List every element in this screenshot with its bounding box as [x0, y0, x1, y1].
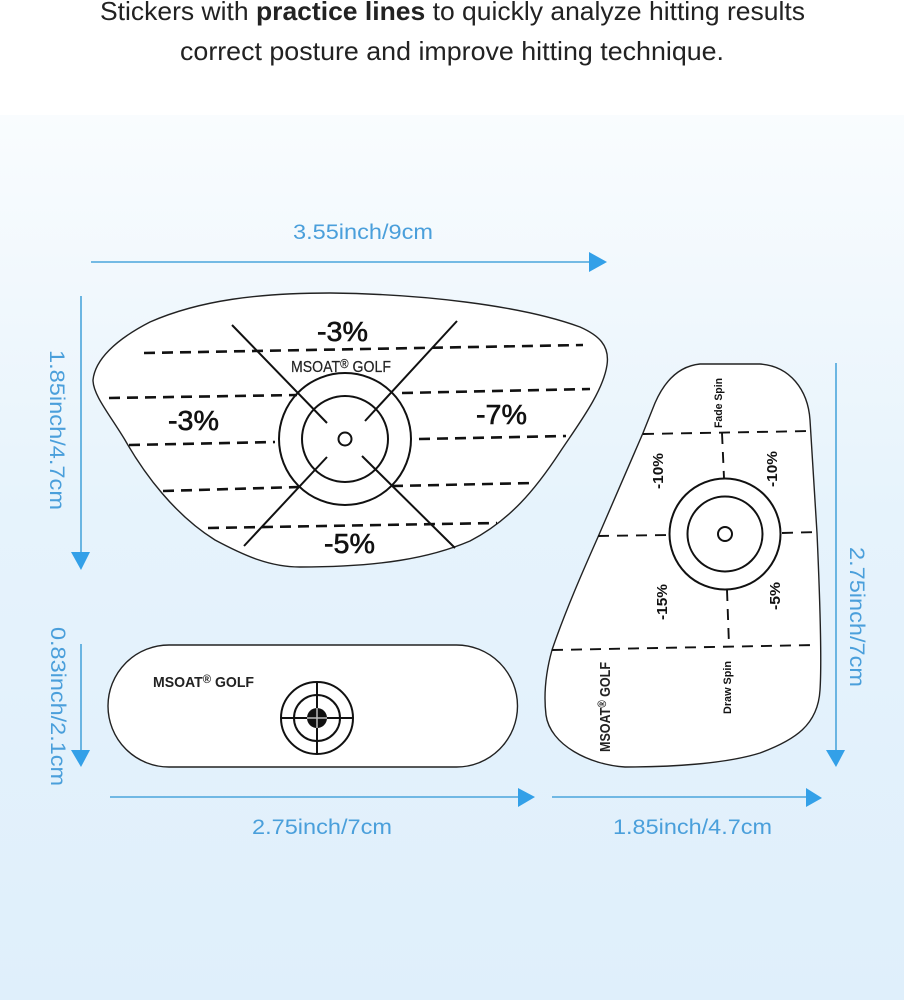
dimension: right height 2.75inch/7cm [826, 363, 868, 767]
iron logo: MSOAT [597, 699, 614, 752]
iron labels [650, 378, 784, 714]
heading [100, 0, 805, 66]
dimension: right height 2.75inch/7cm: 2.75inch/7cm [845, 547, 868, 687]
iron labels: -5% [767, 582, 784, 610]
driver percent labels: -3% [168, 405, 219, 436]
iron dashed lines [552, 431, 817, 650]
putter sticker [108, 645, 518, 767]
dimension: bottom width 2.75inch/7cm [110, 788, 535, 839]
dimension: top width 3.55inch/9cm [91, 221, 607, 272]
driver dashed lines [109, 345, 590, 528]
iron logo: ® [595, 700, 609, 708]
dimension: bottom width 1.85inch/4.7cm: 1.85inch/4.7cm [613, 816, 772, 839]
dimension: top width 3.55inch/9cm: 3.55inch/9cm [293, 221, 433, 244]
iron labels: Draw Spin [722, 661, 734, 714]
putter logo: MSOAT [153, 674, 206, 691]
iron sticker [545, 364, 821, 767]
driver percent labels [168, 316, 527, 559]
driver target circles [279, 373, 411, 505]
dimension: left height 0.83inch/2.1cm: 0.83inch/2.1cm [46, 627, 69, 786]
putter sticker outline [108, 645, 518, 767]
driver logo: GOLF [349, 359, 391, 376]
heading: correct posture and improve hitting technique. [180, 36, 724, 66]
iron sticker outline [545, 364, 821, 767]
dimension: left height 1.85inch/4.7cm [45, 296, 90, 570]
dimension: left height 0.83inch/2.1cm [46, 627, 90, 786]
driver logo: MSOAT [291, 359, 347, 376]
iron labels: -10% [650, 453, 667, 489]
iron labels: -15% [654, 584, 671, 620]
driver percent labels: -5% [324, 528, 375, 559]
driver sticker [93, 293, 607, 567]
iron labels: Fade Spin [713, 378, 725, 428]
driver sticker outline [93, 293, 607, 567]
iron target circles [670, 478, 780, 590]
putter logo: ® [203, 672, 211, 686]
driver logo: ® [340, 356, 349, 371]
dimension: bottom width 1.85inch/4.7cm [552, 788, 822, 839]
driver crosshair diagonals [232, 321, 457, 548]
driver percent labels: -3% [317, 316, 368, 347]
iron logo: GOLF [597, 662, 614, 700]
putter logo: GOLF [211, 674, 254, 691]
putter target [281, 682, 353, 754]
dimension: bottom width 2.75inch/7cm: 2.75inch/7cm [252, 816, 392, 839]
iron labels: -10% [764, 451, 781, 487]
driver percent labels: -7% [476, 399, 527, 430]
dimension: left height 1.85inch/4.7cm: 1.85inch/4.7cm [45, 350, 68, 510]
